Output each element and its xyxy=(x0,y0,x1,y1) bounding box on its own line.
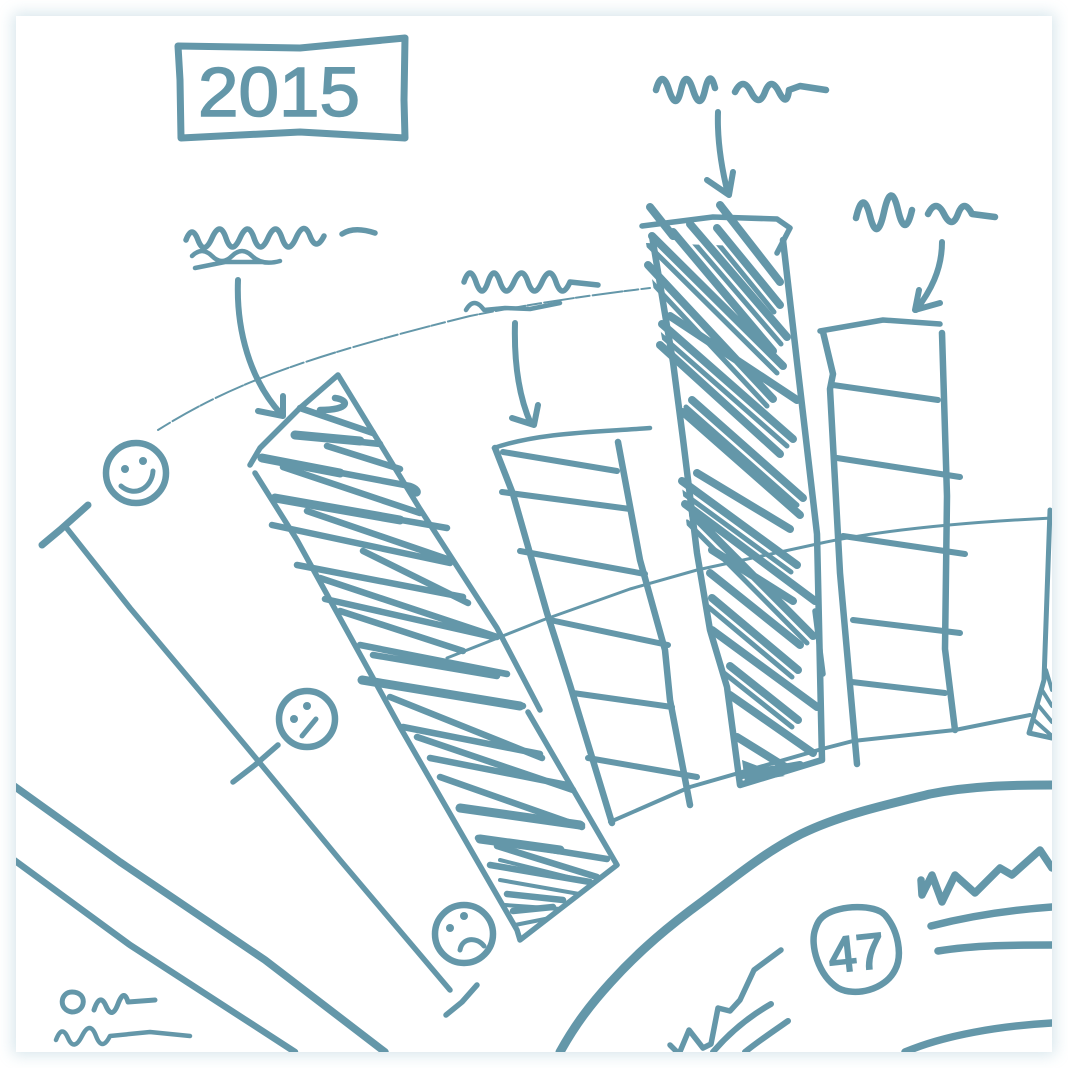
number badge: 47 xyxy=(814,907,899,992)
band lines: left xyxy=(14,786,385,1052)
arrow: bar 3 xyxy=(707,112,733,195)
thin arc: middle level xyxy=(447,518,1052,658)
bar 4: lined xyxy=(820,320,965,764)
year label box xyxy=(178,38,405,138)
bar 2: lined xyxy=(494,428,697,823)
note scribble: bar 3 xyxy=(656,78,826,101)
arrow: bar 4 xyxy=(915,242,942,310)
arrow: bar 1 xyxy=(238,280,283,416)
thick outer arc xyxy=(560,785,1052,1052)
arrow: bar 2 xyxy=(512,323,538,425)
note scribble: bar 1 xyxy=(186,228,375,268)
bar 1: hatched xyxy=(250,375,617,940)
number badge: 47: 47 xyxy=(826,922,887,984)
note scribble: bottom left xyxy=(56,992,190,1045)
note scribble: bar 2 xyxy=(464,273,598,310)
thin inner arc xyxy=(905,1023,1052,1052)
icon: happy face xyxy=(106,443,166,503)
thin arc: top level xyxy=(158,288,650,430)
axis with ticks xyxy=(42,505,477,1015)
note scribble: bar 4 xyxy=(856,195,995,229)
icon: sad face xyxy=(435,905,493,963)
icon: neutral face xyxy=(279,691,335,747)
year label box: 2015 xyxy=(198,53,360,131)
bar 5: partial at edge xyxy=(1029,510,1052,738)
bar 3: hatched xyxy=(642,205,823,785)
note scribble: bottom xyxy=(670,950,788,1054)
note scribble: right xyxy=(921,850,1052,951)
thin arc: baseline xyxy=(610,715,1030,822)
